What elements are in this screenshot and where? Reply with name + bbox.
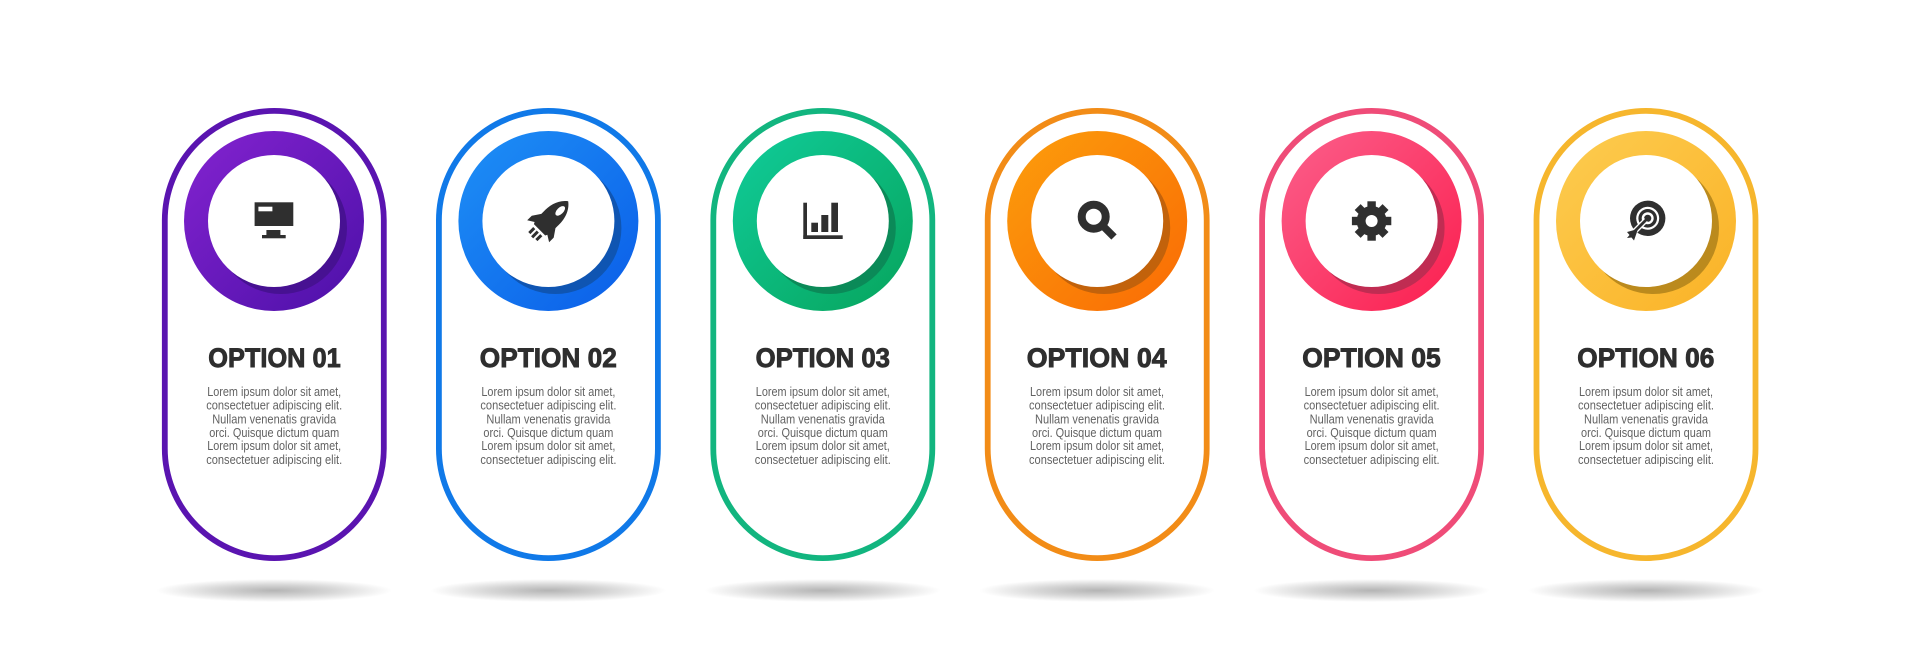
heading: OPTION 05 (1302, 343, 1441, 373)
heading: OPTION 06 (1577, 343, 1714, 373)
pill outline (165, 111, 384, 558)
description text: Lorem ipsum dolor sit amet, (756, 384, 890, 399)
pill outline (1536, 111, 1756, 558)
heading: OPTION 02 (480, 343, 617, 373)
pill outline (439, 111, 658, 558)
description text (1578, 384, 1714, 467)
heading: OPTION 01 (208, 343, 341, 373)
card: option 03 (705, 111, 941, 602)
description text: consectetuer adipiscing elit. (1578, 452, 1714, 467)
ground shadow (979, 579, 1215, 602)
card: option 02 (430, 111, 666, 602)
icon badge ring (1556, 131, 1736, 311)
heading: OPTION 04 (1027, 343, 1167, 373)
description text: orci. Quisque dictum quam (758, 425, 888, 440)
card: option 01 (156, 111, 392, 602)
description text: Lorem ipsum dolor sit amet, (1305, 384, 1439, 399)
pill outline (713, 111, 932, 558)
icon: rocket (521, 190, 579, 248)
description text: consectetuer adipiscing elit. (480, 398, 616, 413)
description text: Lorem ipsum dolor sit amet, (1030, 438, 1164, 453)
description text: Nullam venenatis gravida (212, 411, 337, 426)
icon: target with arrow (1627, 201, 1665, 240)
card: option 04 (979, 111, 1215, 602)
icon: monitor (255, 202, 293, 238)
ground shadow (705, 579, 941, 602)
description text: Nullam venenatis gravida (1310, 411, 1434, 426)
description text: Lorem ipsum dolor sit amet, (481, 438, 615, 453)
description text: Lorem ipsum dolor sit amet, (207, 384, 341, 399)
icon badge ring (1282, 131, 1462, 311)
description text: orci. Quisque dictum quam (483, 425, 613, 440)
description text: Nullam venenatis gravida (1584, 411, 1709, 426)
description text: Lorem ipsum dolor sit amet, (1030, 384, 1164, 399)
description text: Lorem ipsum dolor sit amet, (1305, 438, 1439, 453)
description text (480, 384, 616, 467)
description text: Lorem ipsum dolor sit amet, (207, 438, 341, 453)
description text: consectetuer adipiscing elit. (755, 452, 891, 467)
description text (1029, 384, 1165, 467)
description text: Nullam venenatis gravida (761, 411, 885, 426)
description text (1304, 384, 1440, 467)
icon badge ring (458, 131, 638, 311)
description text: consectetuer adipiscing elit. (206, 452, 342, 467)
ground shadow (1254, 579, 1490, 602)
icon badge ring (184, 131, 364, 311)
card: option 06 (1528, 111, 1764, 602)
description text: Nullam venenatis gravida (486, 411, 611, 426)
ground shadow (1528, 579, 1764, 602)
description text: Lorem ipsum dolor sit amet, (1579, 384, 1713, 399)
ground shadow (430, 579, 666, 602)
heading: OPTION 03 (756, 343, 890, 373)
description text (755, 384, 891, 467)
description text: consectetuer adipiscing elit. (755, 398, 891, 413)
description text: orci. Quisque dictum quam (1307, 425, 1437, 440)
description text: orci. Quisque dictum quam (1581, 425, 1711, 440)
description text: orci. Quisque dictum quam (1032, 425, 1162, 440)
description text: consectetuer adipiscing elit. (1304, 452, 1440, 467)
description text (206, 384, 342, 467)
description text: Lorem ipsum dolor sit amet, (756, 438, 890, 453)
description text: consectetuer adipiscing elit. (206, 398, 342, 413)
description text: consectetuer adipiscing elit. (1029, 452, 1165, 467)
pill outline (1262, 111, 1481, 558)
icon: gear (1352, 201, 1391, 241)
description text: orci. Quisque dictum quam (209, 425, 339, 440)
pill outline (988, 111, 1207, 558)
icon badge ring (733, 131, 913, 311)
card: option 05 (1254, 111, 1490, 602)
description text: Lorem ipsum dolor sit amet, (481, 384, 615, 399)
description text: consectetuer adipiscing elit. (1304, 398, 1440, 413)
description text: Lorem ipsum dolor sit amet, (1579, 438, 1713, 453)
description text: consectetuer adipiscing elit. (480, 452, 616, 467)
description text: consectetuer adipiscing elit. (1029, 398, 1165, 413)
description text: consectetuer adipiscing elit. (1578, 398, 1714, 413)
icon badge ring (1007, 131, 1187, 311)
description text: Nullam venenatis gravida (1035, 411, 1160, 426)
icon: magnifying glass (1082, 205, 1114, 237)
icon: bar chart (803, 203, 843, 239)
ground shadow (156, 579, 392, 602)
